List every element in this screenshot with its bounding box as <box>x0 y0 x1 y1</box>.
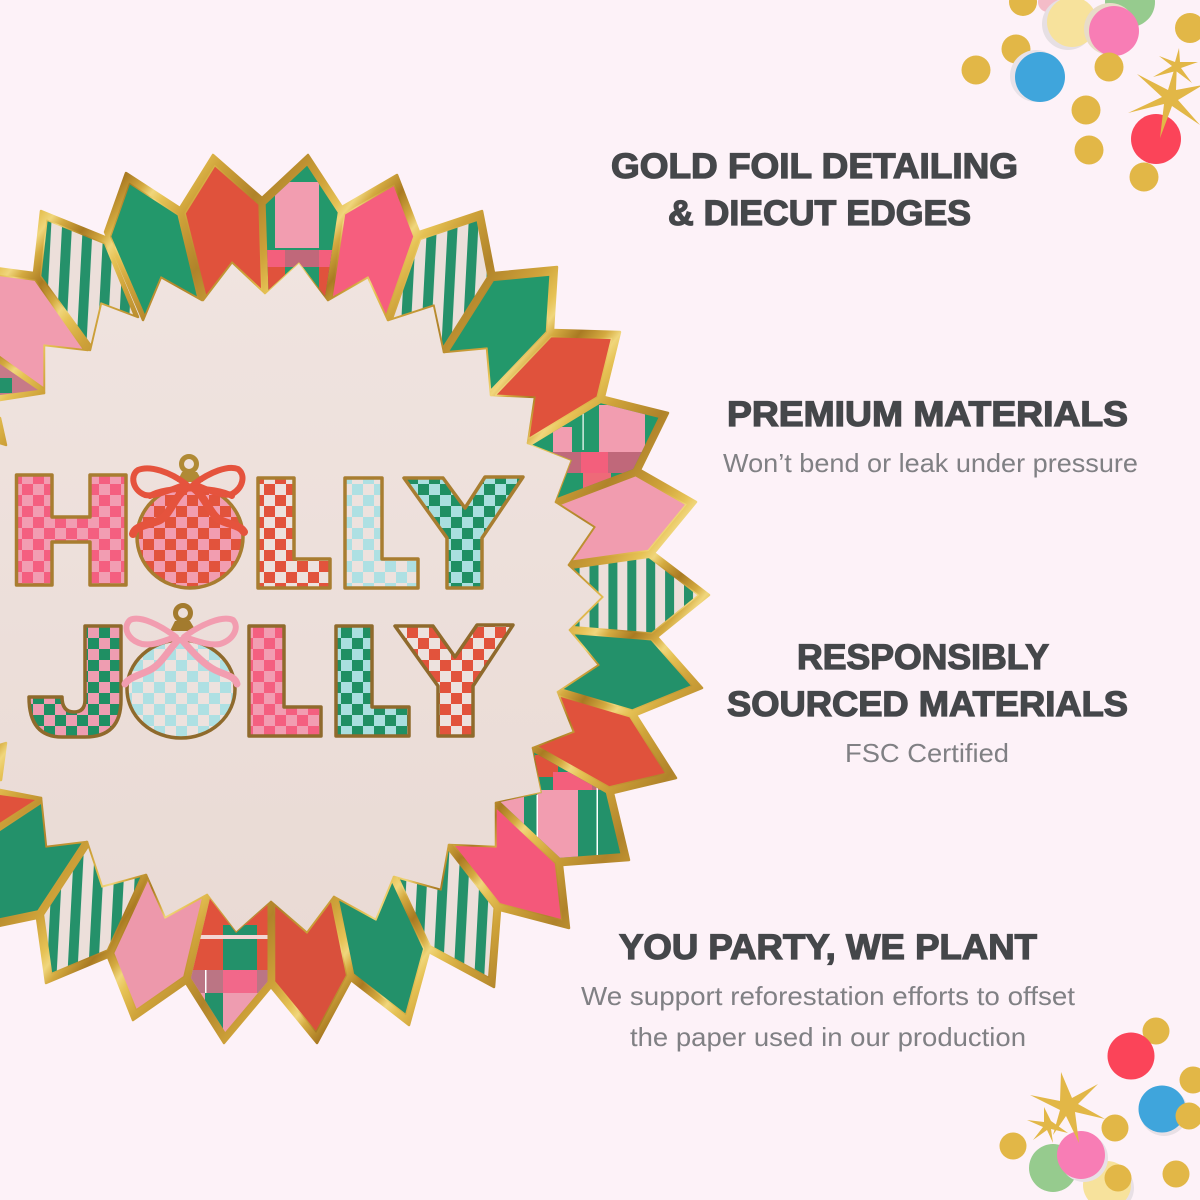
feature: responsibly sourced: SOURCED MATERIALS <box>727 684 1128 724</box>
petal: stripes <box>394 845 500 987</box>
feature: you party we plant <box>581 927 1076 1052</box>
petal: green <box>334 877 429 1025</box>
petal: stripes <box>388 211 494 352</box>
confetti: bottom right <box>1000 1018 1200 1200</box>
letter Y green <box>404 477 523 588</box>
feature: gold foil heading <box>611 146 1018 233</box>
feature: premium materials: PREMIUM MATERIALS <box>727 394 1128 434</box>
feature: responsibly sourced <box>727 637 1128 768</box>
petal: hot pink <box>328 175 419 320</box>
icon: small gold star bottom <box>1027 1107 1068 1143</box>
letter L green <box>336 626 409 736</box>
petal: plaid lower right <box>490 745 635 870</box>
petal: red <box>271 897 351 1043</box>
feature: you party we plant: YOU PARTY, WE PLANT <box>619 927 1037 967</box>
petal: red <box>533 692 676 793</box>
petal: plaid bottom <box>185 890 275 1045</box>
petal: stripes top left <box>34 211 138 350</box>
letter L pink <box>249 626 321 736</box>
petal: light pink <box>108 875 207 1020</box>
petal: plaid upper right <box>525 395 670 505</box>
feature: premium materials <box>723 394 1138 478</box>
petal: red <box>491 330 620 443</box>
lettering: JOLLY <box>29 606 513 738</box>
petal: green <box>558 630 702 715</box>
ornament O blue <box>125 606 237 738</box>
petal: stripes lower left <box>37 842 146 983</box>
ornament O red <box>133 456 244 588</box>
lettering: HOLLY <box>16 456 523 588</box>
petal: light pink left <box>0 262 88 393</box>
letter Y red <box>395 625 513 736</box>
petal: light pink <box>556 470 696 565</box>
confetti: top right <box>962 0 1200 192</box>
letter L red <box>258 478 330 588</box>
feature: responsibly sourced: FSC Certified <box>845 738 1009 768</box>
petal: plaid top <box>262 154 342 302</box>
gold edge fragments at left <box>0 418 6 780</box>
feature: premium materials: Won’t bend or leak under pressure <box>723 448 1138 478</box>
feature: responsibly sourced: RESPONSIBLY <box>797 637 1049 677</box>
feature: gold foil heading: GOLD FOIL DETAILING <box>611 146 1018 186</box>
petal: red left <box>0 780 41 845</box>
petal: stripes right <box>569 553 709 637</box>
feature: gold foil heading: & DIECUT EDGES <box>668 193 971 233</box>
plate centre <box>0 240 622 960</box>
feature: you party we plant: We support reforestation efforts to offset <box>581 981 1076 1011</box>
plate petals <box>0 150 709 1045</box>
icon: large gold star <box>1128 60 1200 138</box>
icon: small gold star <box>1153 48 1198 83</box>
icon: large gold star bottom <box>1030 1072 1105 1143</box>
panel: paper plate <box>0 150 709 1045</box>
letter L blue <box>345 478 418 588</box>
petal: green <box>105 173 202 320</box>
petal: hot pink <box>449 803 569 928</box>
petal: plaid left <box>0 340 44 400</box>
feature: you party we plant: the paper used in our production <box>630 1022 1026 1052</box>
letter H <box>16 475 126 585</box>
petal: green <box>444 267 557 395</box>
petal: red <box>180 155 265 300</box>
letter J <box>29 626 121 737</box>
petal: green left <box>0 798 87 935</box>
